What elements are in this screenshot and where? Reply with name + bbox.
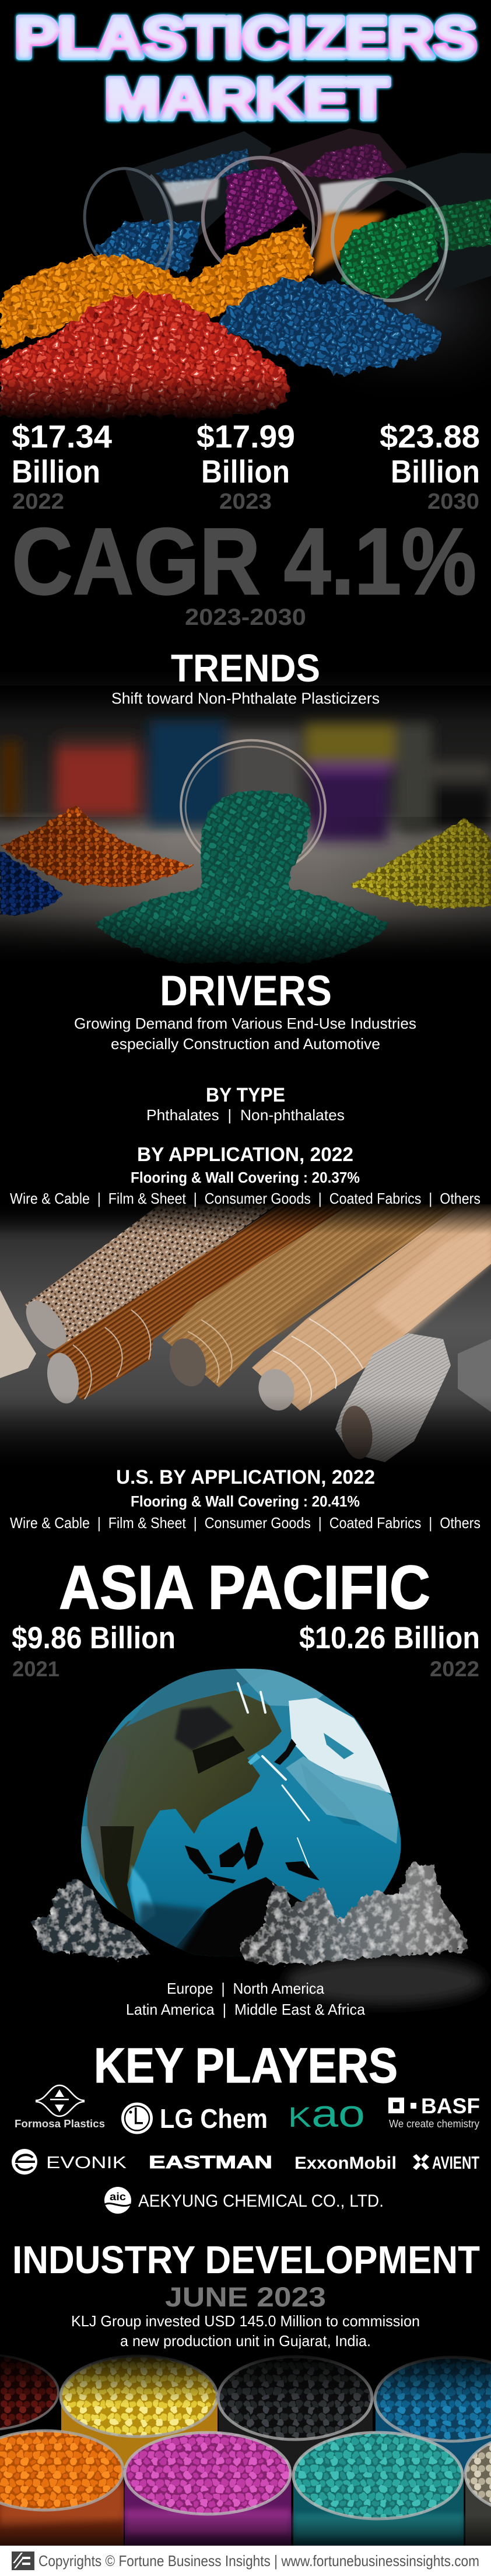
other regions [126,1980,366,2018]
stat 2022: $17.34 [12,418,112,455]
logo: Aekyung Chemical: aic [110,2191,126,2203]
fade to black [0,373,491,421]
roll: granite [18,1204,277,1357]
logo: Aekyung Chemical: AEKYUNG CHEMICAL CO., LTD. [138,2191,384,2211]
streak [262,1756,286,1780]
container: maroon [0,2354,58,2430]
upper sea haze [125,1669,274,1727]
spilled orange pellets [0,224,313,347]
Asia Pacific stats [12,1621,480,1681]
title [15,5,476,131]
jar: purple [193,128,406,288]
jar: blue [75,131,271,283]
trends text: Shift toward Non-Phthalate Plasticizers [111,690,380,707]
development text: KLJ Group invested USD 145.0 Million to commission [71,2312,420,2330]
other regions: Latin America | Middle East & Africa [126,2001,366,2018]
green pellet column [201,791,310,893]
development text: a new production unit in Gujarat, India. [120,2332,371,2350]
logo: Eastman: EASTMAN [149,2152,272,2172]
stat 2022: Billion [12,453,100,490]
logo: Evonik: EVONIK [46,2154,127,2172]
hero image: plastic pellets and jars [0,128,491,421]
bright sea highlight [131,1865,156,1925]
red pellet pile [0,295,288,418]
CAGR: 2023-2030 [185,604,306,630]
glass ring [172,731,334,884]
japan islands [274,1739,296,1765]
drivers text: Growing Demand from Various End-Use Industries [74,1015,416,1032]
back row containers [0,2354,491,2474]
logo: BASF: BASF [421,2094,480,2118]
footer [0,2546,491,2576]
bottom fade [0,1394,491,1485]
heading: key players: KEY PLAYERS [94,2038,398,2093]
stat 2030: $23.88 [380,418,480,455]
other regions: Europe | North America [167,1980,325,1997]
stat 2030: Billion [391,453,480,490]
hexagon tile [458,1339,491,1412]
logo: Aekyung Chemical [104,2187,384,2214]
logo: Formosa Plastics [15,2085,105,2130]
orange pile [0,805,194,887]
container: orange [0,2431,124,2546]
stat 2023: 2023 [219,490,272,514]
container: teal [293,2432,464,2546]
heading: Asia Pacific: ASIA PACIFIC [59,1553,430,1622]
heading: trends: TRENDS [171,646,320,690]
front row containers [0,2430,491,2546]
footer background [0,2546,491,2576]
blurred backdrop [0,671,491,963]
container: magenta [125,2432,291,2546]
edge vignette [0,817,491,963]
blue pile [0,850,62,916]
logo: LG Chem [121,2103,268,2134]
stat 2030: 2030 [427,490,479,514]
stat 2023: Billion [201,453,290,490]
stat 2023 [197,418,295,514]
stat 2023: $17.99 [197,418,295,455]
drivers text [74,1015,416,1053]
market size figures [12,418,480,514]
by type [146,1084,345,1124]
jar: green [324,153,491,308]
plastic crystals left [31,1878,150,1959]
by type: Phthalates | Non-phthalates [146,1106,345,1124]
plastic crystals right [238,1864,469,1965]
U.S. by application 2022: Flooring & Wall Covering : 20.41% [131,1493,360,1510]
grey left land [86,1742,128,1879]
korea/taiwan dots [248,1753,261,1765]
flooring rolls image [0,1202,491,1485]
by application 2022: BY APPLICATION, 2022 [137,1144,353,1166]
borneo [219,1842,244,1867]
roll: dark wood [43,1204,350,1406]
stat 2022 [12,418,112,514]
footer logo [12,2551,34,2570]
new guinea [285,1861,320,1881]
stat 2021: $9.86 Billion [12,1621,176,1655]
globe body [76,1666,408,1963]
stat 2022: $10.26 Billion [299,1621,480,1655]
white plastic wrinkles [289,1698,394,1794]
stat 2022: 2022 [12,490,64,514]
bottom fade [0,916,491,971]
roll: light tan [252,1204,491,1415]
yellow pile [350,818,491,908]
container: beige [465,2430,491,2546]
top fade [0,686,491,721]
bottom fade [0,2515,491,2546]
lower sea shade [134,1902,206,1960]
streak [282,1785,309,1820]
streak [297,1838,309,1867]
container: yellow [61,2356,218,2468]
roll: left cream [0,1290,36,1378]
roll: white [335,1333,451,1462]
title line 1: PLASTICIZERS [15,5,476,69]
floor [0,1202,491,1482]
stat 2021 [12,1621,176,1681]
sumatra [185,1846,213,1874]
heading: drivers: DRIVERS [160,967,332,1015]
green pile [94,885,388,963]
logo: LG Chem: LG Chem [160,2103,268,2134]
black band behind drivers [0,969,491,1202]
dark mountain patches [175,1707,233,1750]
by application 2022 [10,1144,481,1207]
globe wrapped in plastic [31,1666,484,2004]
logo: Evonik [12,2149,127,2175]
blue pellet pile [216,279,441,375]
philippines and sulawesi [244,1826,264,1870]
logo: Avient [413,2152,479,2173]
india tip dark [100,1826,136,1925]
top fade [0,2348,491,2404]
bottom image: pellet containers [0,2348,491,2546]
container: black [218,2357,373,2468]
logo: BASF: We create chemistry [389,2118,479,2130]
logo: BASF [388,2094,480,2130]
title line 2: MARKET [105,67,388,131]
roll: medium tan [162,1204,461,1391]
left rim haze [80,1826,117,1908]
streak [261,1692,265,1712]
plastic top band [235,1669,327,1707]
stat 2030 [380,418,480,514]
container: sky blue [375,2357,491,2474]
sea deep panel [336,1816,362,1826]
java [207,1874,236,1883]
trends image: green pellets and ring [0,671,491,971]
by type: BY TYPE [206,1084,285,1106]
australia [175,1877,303,1960]
development text [71,2312,420,2350]
streak [238,1683,248,1712]
floor glow [233,251,491,420]
drivers text: especially Construction and Automotive [111,1035,380,1053]
stat 2022 [299,1621,480,1681]
U.S. by application 2022 [10,1466,481,1532]
stat 2022: 2022 [430,1657,479,1681]
U.S. by application 2022: U.S. BY APPLICATION, 2022 [116,1466,375,1488]
top fade [0,1202,491,1234]
company logos [12,2085,480,2214]
stat 2021: 2021 [12,1657,59,1681]
date: JUNE 2023 [165,2281,326,2312]
asia land [87,1690,282,1925]
logo: Formosa Plastics: Formosa Plastics [15,2118,105,2130]
by application 2022: Flooring & Wall Covering : 20.37% [131,1169,360,1186]
logo: Kao: Kao [288,2092,365,2135]
logo: ExxonMobil: ExxonMobil [294,2154,397,2173]
blurred jars [0,721,491,841]
floor glow [286,1958,484,2004]
